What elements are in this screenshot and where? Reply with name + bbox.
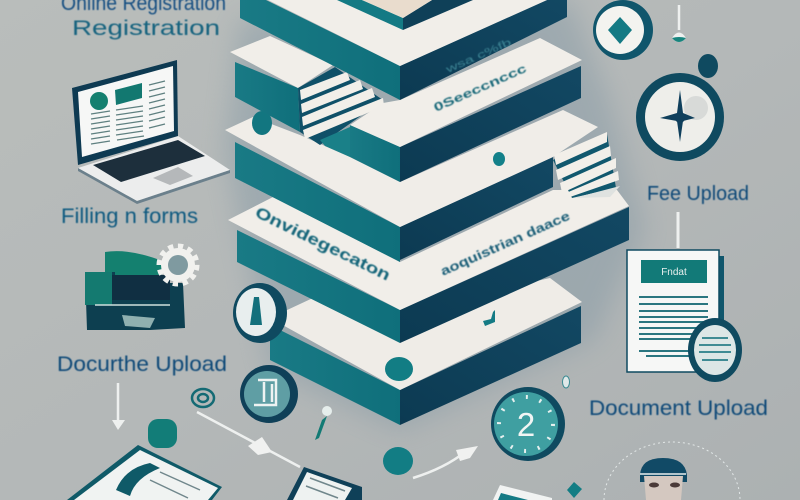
icon: swirl — [192, 389, 214, 407]
slab label right: aoquistrian daace — [438, 208, 572, 279]
top block — [337, 0, 473, 30]
stairs left — [298, 67, 384, 157]
icon: clock left — [233, 283, 287, 343]
arrow: diagonal to document — [197, 412, 300, 467]
label: document upload right: Document Upload — [589, 397, 768, 420]
icon: clock top right — [593, 0, 653, 60]
icon: striped badge — [688, 318, 742, 382]
arrow: toward clock two — [413, 446, 478, 478]
tier 2 right slab — [350, 38, 582, 182]
icon: teal drop — [252, 111, 272, 135]
picture document — [493, 485, 552, 500]
slab label left: Onvidegecaton — [252, 204, 393, 284]
tier 1 top slab — [240, 0, 567, 100]
label: filling forms: Filling n forms — [61, 205, 198, 228]
icon: gear device — [85, 247, 196, 330]
document right: Fndat — [661, 267, 687, 278]
title: online registration — [61, 0, 226, 40]
icon: location pin — [493, 152, 505, 166]
arrow: down to document — [676, 212, 680, 248]
label: document upload left: Docurthe Upload — [57, 353, 227, 376]
icon: small mark — [483, 310, 495, 326]
icon: small droplet — [562, 376, 570, 388]
slab label: 0Seeccnccc — [432, 61, 529, 115]
arrow: down left — [112, 383, 125, 430]
tier 3 slab — [225, 110, 620, 262]
document right — [627, 250, 724, 372]
icon: numbered clock: 2 — [517, 406, 535, 443]
label: fee upload: Fee Upload — [647, 183, 749, 205]
icon: small badge — [698, 54, 718, 78]
document bottom centre — [287, 467, 362, 500]
subtitle: registration: Registration — [72, 17, 220, 40]
icon: large clock — [636, 73, 724, 161]
tier 2 left slab — [230, 36, 384, 157]
icon: laptop — [72, 60, 230, 204]
document bottom left — [67, 445, 222, 500]
person with helmet — [604, 442, 740, 500]
icon: teal diamond — [567, 482, 582, 498]
stack shadow — [225, 0, 645, 430]
tier 4 slab — [228, 190, 629, 343]
slab label: wsa c%fb — [443, 37, 514, 76]
icon: teal pill — [385, 357, 413, 381]
icon: teal rounded square — [148, 419, 177, 448]
icon: numbered clock — [491, 387, 565, 461]
icon: clock badge — [240, 365, 298, 423]
icon: teal badge — [383, 447, 413, 475]
icon: key — [315, 406, 332, 440]
stairs right — [553, 132, 620, 198]
arrow: top right — [672, 5, 686, 42]
tier 5 bottom slab — [270, 278, 582, 425]
